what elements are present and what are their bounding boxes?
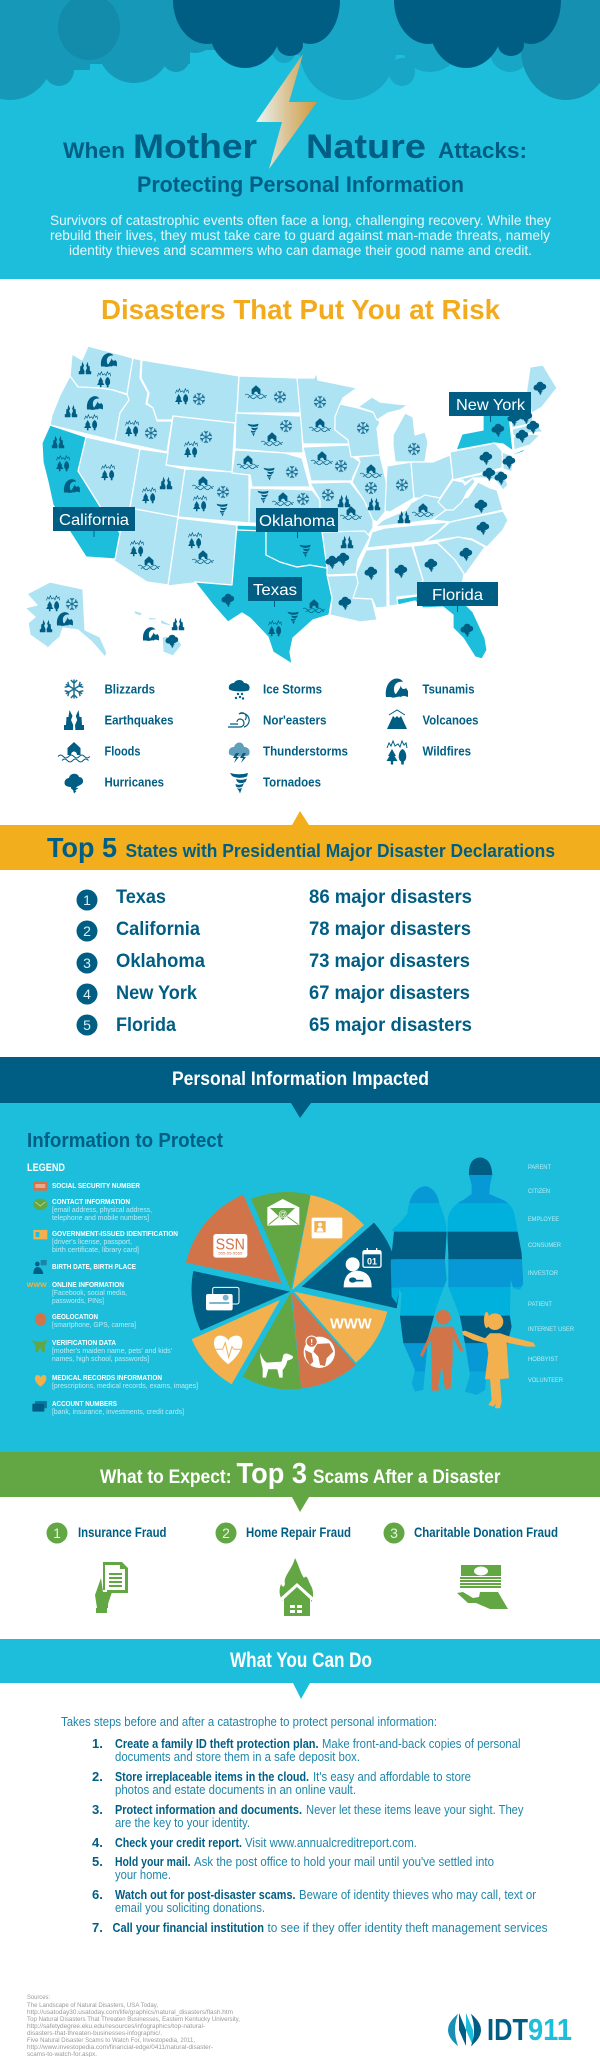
- top 5 banner: Top 5: [47, 832, 117, 863]
- icon: document in hand: [95, 1562, 128, 1613]
- legend entries: ACCOUNT NUMBERS: [52, 1401, 117, 1408]
- wedge: verification data: [243, 1293, 301, 1389]
- legend entries: passwords, PINs]: [52, 1298, 104, 1305]
- info legend: [27, 1162, 198, 1416]
- rank 2: 78 major disasters: [309, 919, 471, 940]
- intro line: Takes steps before and after a catastrophe to protect personal information:: [61, 1714, 437, 1729]
- family silhouettes: [387, 1153, 536, 1408]
- sources: Sources:: [27, 1994, 50, 2001]
- wedge: social security number: SSN: [216, 1236, 245, 1253]
- girl: [462, 1312, 536, 1408]
- legend entries: GOVERNMENT-ISSUED IDENTIFICATION: [52, 1231, 178, 1238]
- state label: Florida: [417, 582, 498, 612]
- step 6: 6.: [92, 1887, 103, 1902]
- disaster legend: Floods: [104, 744, 140, 758]
- step 5: [92, 1854, 494, 1882]
- wedge: medical records: [192, 1300, 280, 1384]
- scam 2: home repair fraud: 2: [222, 1525, 230, 1541]
- banner: personal information impacted: [0, 1057, 600, 1118]
- step 7: 7.: [92, 1920, 103, 1935]
- title: Nature: [306, 128, 426, 166]
- rank 3: 73 major disasters: [309, 951, 470, 972]
- step 1: 1.: [92, 1736, 103, 1751]
- logo: IDT911: IDT: [487, 2012, 528, 2047]
- wedge: birth date: 01: [367, 1256, 377, 1266]
- legend entries: SOCIAL SECURITY NUMBER: [52, 1183, 140, 1190]
- map icons: tsunamis: [57, 353, 159, 641]
- legend entries: [Facebook, social media,: [52, 1290, 127, 1297]
- legend entries: [smartphone, GPS, camera]: [52, 1322, 136, 1329]
- wedge: contact information: [251, 1192, 311, 1289]
- scam 1: insurance fraud: 1: [53, 1525, 61, 1541]
- heading: disasters: Disasters That Put You at Risk: [101, 294, 500, 325]
- boy: [420, 1310, 463, 1391]
- disaster legend: Hurricanes: [104, 774, 164, 790]
- step 3: 3.: [92, 1802, 103, 1817]
- state label: Oklahoma: [256, 508, 338, 538]
- sources: http://safetydegree.eku.edu/resources/infographics/top-natural-: [27, 2023, 205, 2030]
- wedge: geolocation: !: [310, 1337, 313, 1347]
- step 2: 2.: [92, 1769, 103, 1784]
- info legend: LEGEND: [27, 1162, 65, 1174]
- state label: New York: [449, 392, 531, 422]
- rank 5: 5: [83, 1017, 91, 1033]
- step 3: Protect information and documents.: [115, 1802, 302, 1817]
- state label: Texas: Texas: [253, 582, 297, 599]
- state label: California: [53, 507, 135, 537]
- rank 5: 65 major disasters: [309, 1015, 472, 1036]
- heading: information to protect: Information to Protect: [27, 1130, 223, 1152]
- step 6: [92, 1887, 537, 1915]
- step 4: 4.: [92, 1835, 103, 1850]
- wedge: account numbers: [192, 1271, 290, 1331]
- scam 1: insurance fraud: [46, 1522, 166, 1613]
- sources: [27, 1994, 240, 2057]
- roles list: EMPLOYEE: [528, 1216, 560, 1223]
- scam 3: charitable donation fraud: 3: [390, 1525, 398, 1541]
- legend entries: [52, 1183, 198, 1416]
- step 4: [92, 1835, 417, 1850]
- rank 3: [76, 951, 470, 974]
- legend entries: GEOLOCATION: [52, 1314, 98, 1321]
- icon: nor'easters: [228, 713, 249, 727]
- step 3: Never let these items leave your sight. They: [306, 1802, 524, 1817]
- disaster legend: Thunderstorms: [263, 744, 348, 758]
- legend entries: telephone and mobile numbers]: [52, 1215, 149, 1222]
- wedge: online information: [294, 1292, 387, 1363]
- rank 3: 3: [83, 955, 91, 971]
- sources: Top Natural Disasters That Threaten Businesses, Eastern Kentucky University,: [27, 2016, 240, 2023]
- map icons: floods: [138, 385, 434, 613]
- legend entries: [mother's maiden name, pets' and kids': [52, 1348, 172, 1355]
- icon: blizzards: [64, 680, 84, 698]
- intro paragraph: identity thieves and scammers who can damage their good name and credit.: [69, 242, 532, 258]
- rank 2: 2: [83, 923, 91, 939]
- storm clouds: [0, 0, 600, 100]
- intro paragraph: [50, 212, 551, 258]
- rank 4: 67 major disasters: [309, 983, 470, 1004]
- scam 3: charitable donation fraud: Charitable Donation Fraud: [414, 1524, 558, 1540]
- logo: IDT911: [449, 2012, 572, 2047]
- step 1: documents and store them in a safe deposit box.: [115, 1749, 360, 1764]
- legend icons: WWW: [27, 1282, 47, 1289]
- rank 1: 86 major disasters: [309, 887, 472, 908]
- lightning bolt: [256, 54, 317, 169]
- banner: top 3 scams: [0, 1452, 600, 1512]
- map icons: blizzards: [66, 391, 420, 610]
- title: Mother: [133, 128, 257, 166]
- top 5 list: [76, 887, 472, 1036]
- roles list: PATIENT: [528, 1301, 552, 1308]
- state label: New York: New York: [456, 397, 526, 414]
- step 2: [92, 1769, 471, 1797]
- legend entries: names, high school, passwords]: [52, 1356, 149, 1363]
- banner: what you can do: What You Can Do: [230, 1649, 372, 1672]
- step 1: [92, 1736, 521, 1764]
- step 3: are the key to your identity.: [115, 1815, 250, 1830]
- legend entries: VERIFICATION DATA: [52, 1340, 116, 1347]
- roles list: CONSUMER: [528, 1242, 561, 1249]
- intro paragraph: rebuild their lives, they must take care to guard against man-made threats, namely: [50, 227, 550, 243]
- title: Attacks:: [438, 138, 527, 163]
- step 6: email you soliciting donations.: [115, 1900, 265, 1915]
- rank 1: 1: [83, 892, 91, 908]
- banner: top 3 scams: Top 3: [236, 1458, 307, 1490]
- icon: hurricanes: [64, 774, 83, 794]
- icon: volcanoes: [387, 710, 407, 729]
- wedge: social security number: 555-55-5555: [218, 1251, 242, 1255]
- scam 2: home repair fraud: Home Repair Fraud: [246, 1524, 351, 1540]
- step 2: photos and estate documents in an online vault.: [115, 1782, 356, 1797]
- disaster legend: [58, 678, 478, 794]
- header panel: [0, 0, 600, 279]
- icon: thunderstorms: [229, 742, 250, 763]
- roles list: PARENT: [528, 1164, 551, 1171]
- rank 1: Texas: [116, 887, 166, 908]
- wedge: social security number: [186, 1195, 282, 1283]
- map icons: tornadoes: [216, 424, 311, 625]
- step 4: Visit www.annualcreditreport.com.: [245, 1835, 417, 1850]
- highlighted states: California, Oklahoma, Texas, New York, Florida: [42, 415, 527, 664]
- step 4: Check your credit report.: [115, 1835, 242, 1850]
- step 6: Beware of identity thieves who may call, text or: [299, 1887, 537, 1902]
- legend entries: [email address, physical address,: [52, 1207, 152, 1214]
- icon: ice storms: [229, 680, 250, 700]
- rank 4: 4: [83, 986, 91, 1002]
- rank 1: [76, 887, 472, 910]
- colored bands: parent, citizen, employee, consumer, investor, patient, internet user, hobbyist, volunteer: [387, 1153, 527, 1397]
- legend entries: [prescriptions, medical records, exams, images]: [52, 1383, 198, 1390]
- banner: top 3 scams: What to Expect:: [100, 1467, 232, 1488]
- disaster legend: Blizzards: [104, 682, 155, 696]
- logo mark: [449, 2013, 480, 2046]
- map icons: hurricanes: [166, 382, 546, 648]
- title: [63, 128, 527, 197]
- intro paragraph: Survivors of catastrophic events often face a long, challenging recovery. While they: [50, 212, 551, 228]
- sources: The Landscape of Natural Disasters, USA Today,: [27, 2002, 158, 2009]
- title: Protecting Personal Information: [137, 172, 464, 197]
- US map: [25, 346, 557, 664]
- rank 2: California: [116, 919, 200, 940]
- roles list: INTERNET USER: [528, 1326, 574, 1333]
- step 5: Hold your mail.: [115, 1854, 190, 1869]
- scam 3: charitable donation fraud: [384, 1522, 558, 1609]
- step 2: Store irreplaceable items in the cloud.: [115, 1769, 309, 1784]
- sources: http://usatoday30.usatoday.com/life/graphics/natural_disasters/flash.htm: [27, 2009, 233, 2016]
- step 1: Make front-and-back copies of personal: [322, 1736, 521, 1751]
- roles list: CITIZEN: [528, 1188, 550, 1195]
- state label: Florida: Florida: [432, 587, 483, 604]
- step 6: Watch out for post-disaster scams.: [115, 1887, 296, 1902]
- wedge: birth date: [302, 1223, 399, 1308]
- step 1: Create a family ID theft protection plan.: [115, 1736, 318, 1751]
- state label: California: California: [59, 512, 129, 529]
- icon: tornadoes: [230, 773, 248, 794]
- rank 3: Oklahoma: [116, 951, 205, 972]
- legend entries: [driver's license, passport,: [52, 1239, 132, 1246]
- step 5: Ask the post office to hold your mail until you've settled into: [194, 1854, 494, 1869]
- banner: personal information impacted: Personal Information Impacted: [172, 1069, 429, 1090]
- wedge: contact information: @: [278, 1209, 287, 1219]
- sources: http://www.investopedia.com/financial-edge/0411/natural-disaster-: [27, 2044, 213, 2051]
- legend entries: ONLINE INFORMATION: [52, 1282, 124, 1289]
- step 2: It's easy and affordable to store: [313, 1769, 471, 1784]
- wedge: geolocation: [292, 1293, 356, 1388]
- legend entries: birth certificate, library card]: [52, 1247, 139, 1254]
- rank 5: [76, 1014, 472, 1036]
- step 7: Call your financial institution: [112, 1920, 264, 1935]
- disaster legend: Ice Storms: [263, 682, 322, 696]
- sources: Five Natural Disaster Scams to Watch For, Investopedia, 2011,: [27, 2037, 195, 2044]
- roles list: VOLUNTEER: [528, 1377, 563, 1384]
- step 7: to see if they offer identity theft management services: [268, 1920, 548, 1935]
- panel: information section background: [0, 1103, 600, 1452]
- legend entries: CONTACT INFORMATION: [52, 1199, 130, 1206]
- light states: [25, 346, 557, 657]
- icon: cash in hand: [457, 1565, 508, 1609]
- disaster legend: Volcanoes: [422, 712, 478, 728]
- step 3: [92, 1802, 524, 1830]
- icon: floods: [58, 742, 90, 762]
- step 5: your home.: [115, 1867, 171, 1882]
- pie chart: [186, 1192, 399, 1389]
- state label: Texas: [248, 577, 302, 607]
- icon: wildfires: [386, 741, 407, 764]
- icon: house on fire: [278, 1558, 316, 1616]
- rank 4: New York: [116, 983, 197, 1004]
- scam 2: home repair fraud: [216, 1522, 351, 1616]
- title: When: [63, 138, 125, 163]
- disaster legend: Tornadoes: [263, 774, 321, 790]
- disaster legend: Tsunamis: [422, 682, 474, 696]
- scam 1: insurance fraud: Insurance Fraud: [78, 1524, 166, 1540]
- banner: top 3 scams: Scams After a Disaster: [313, 1467, 501, 1488]
- top 5 banner: States with Presidential Major Disaster Declarations: [126, 841, 555, 861]
- top 5 banner: [0, 811, 600, 870]
- rank 5: Florida: [116, 1015, 176, 1036]
- rank 4: [76, 983, 470, 1004]
- legend entries: BIRTH DATE, BIRTH PLACE: [52, 1264, 136, 1271]
- legend entries: MEDICAL RECORDS INFORMATION: [52, 1375, 162, 1382]
- step 7: [92, 1920, 548, 1935]
- state label: Oklahoma: Oklahoma: [259, 513, 335, 530]
- rank 2: [76, 919, 471, 942]
- icon: tsunamis: [386, 678, 408, 698]
- step 5: 5.: [92, 1854, 103, 1869]
- roles list: [528, 1164, 574, 1384]
- roles list: INVESTOR: [528, 1270, 558, 1277]
- disaster legend: Earthquakes: [104, 712, 174, 728]
- disaster legend: Nor'easters: [263, 712, 326, 728]
- legend icons: [27, 1182, 47, 1412]
- sources: disasters-that-threaten-businesses-infographic/.: [27, 2030, 162, 2037]
- wedge: government id: [292, 1195, 364, 1290]
- action list: [92, 1736, 548, 1935]
- banner: what you can do: [0, 1639, 600, 1699]
- logo: IDT911: 911: [528, 2012, 572, 2047]
- legend entries: [bank, insurance, investments, credit cards]: [52, 1409, 184, 1416]
- disaster legend: Wildfires: [422, 744, 471, 758]
- icon: earthquakes: [64, 710, 84, 730]
- map icons: wildfires: [46, 372, 282, 636]
- roles list: HOBBYIST: [528, 1356, 558, 1363]
- wedge: online information: WWW: [330, 1316, 372, 1332]
- map icons: earthquakes: [40, 362, 410, 632]
